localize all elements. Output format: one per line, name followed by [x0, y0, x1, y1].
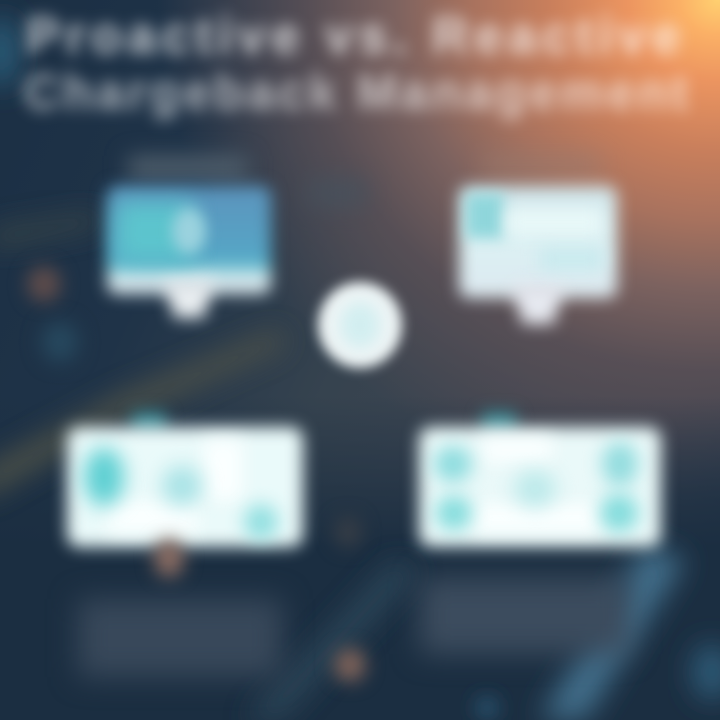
subtitle over left speech bubble: [128, 156, 248, 180]
bubble pointer: [156, 270, 222, 331]
circle centre tint: [340, 302, 380, 348]
lower tinted band: [540, 248, 604, 270]
text lines: [420, 578, 630, 654]
centre circle: versus badge: [308, 273, 411, 377]
teal tab above card: [482, 412, 516, 436]
centre icon: [172, 208, 206, 254]
node: lower right teal: [244, 504, 278, 540]
node: bottom-left teal: [436, 496, 472, 530]
decorative dot: orange bottom centre: [334, 648, 366, 682]
panel: left flow diagram card: [54, 403, 316, 560]
decorative dot: orange left: [27, 266, 61, 302]
label at top centre: [308, 178, 368, 208]
card body: [419, 427, 661, 547]
upper-left beam: [0, 212, 100, 248]
teal left shade: [116, 202, 192, 262]
circle: [318, 282, 402, 368]
decorative dot: dim centre: [334, 516, 362, 548]
panel: right flow diagram card: [406, 403, 674, 560]
olive light beam: [0, 330, 285, 500]
highlight lower: [108, 502, 198, 532]
title line 1: Proactive vs. Reactive: [26, 7, 686, 64]
node: top-left teal: [434, 446, 472, 482]
right teal blob: [692, 644, 720, 700]
teal tab above card: [132, 412, 166, 436]
text block: left description: [70, 592, 290, 684]
panel: right speech bubble (reactive): [447, 174, 629, 336]
highlight lower: [472, 504, 602, 532]
node: bottom-right teal: [600, 494, 638, 532]
bottom blob: [475, 696, 499, 720]
bubble body: [107, 186, 271, 294]
text block: right description: [411, 569, 641, 665]
bottom centre beam: [245, 560, 420, 720]
node: centre teal: [514, 470, 556, 508]
bottom-right blue beam: [540, 545, 685, 720]
highlight text lines: [506, 208, 602, 236]
decorative dot: blue left: [42, 322, 78, 362]
title line 2: Chargeback Management: [24, 66, 691, 120]
node: top-right teal: [602, 442, 638, 486]
left teal edge glow: [0, 16, 18, 88]
panel: left speech bubble (proactive): [94, 175, 283, 331]
bubble body: [459, 186, 617, 298]
highlight upper: [482, 438, 552, 462]
connector below left card: [154, 538, 184, 578]
text lines: [78, 599, 282, 677]
label over right speech bubble: [482, 154, 602, 178]
node: centre teal: [162, 466, 202, 506]
node: large teal left: [84, 448, 124, 506]
teal corner block: [466, 194, 504, 238]
highlight upper: [204, 440, 242, 500]
card body: [67, 427, 303, 547]
bubble pointer: [506, 285, 570, 336]
